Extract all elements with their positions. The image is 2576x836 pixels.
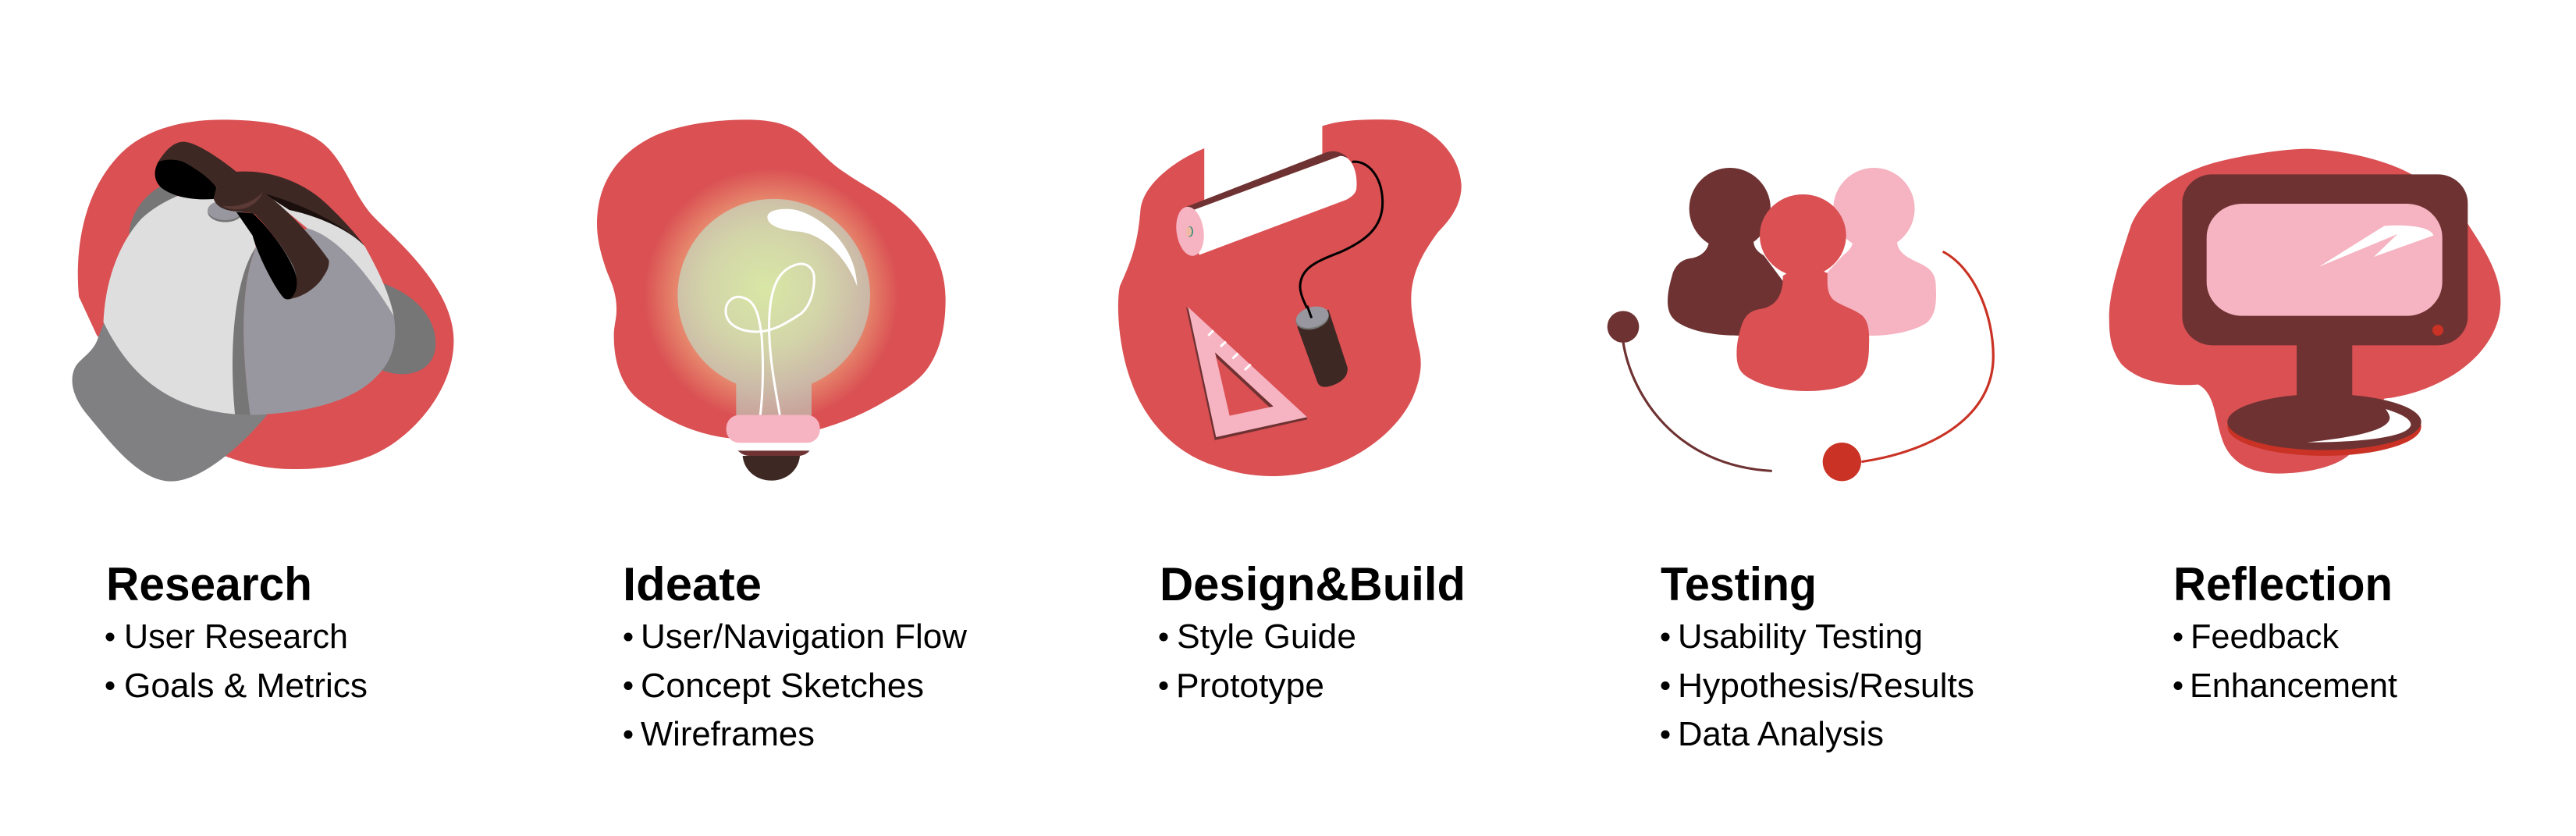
icon: ideate light bulb — [597, 119, 946, 481]
bow inner shadow — [261, 192, 364, 246]
roller wire handle — [1300, 162, 1383, 318]
hat button top — [208, 201, 243, 220]
set square shadow — [1186, 307, 1307, 440]
text block: Research — [106, 558, 368, 705]
icon: testing users and arcs — [1608, 168, 1993, 481]
hat dome grey panel — [243, 229, 395, 415]
text block: Testing — [1661, 558, 1974, 753]
wire tip — [1307, 306, 1312, 318]
hat dome light panel — [103, 196, 256, 414]
bulb base band — [735, 447, 811, 456]
heading: Design&Build — [1160, 558, 1466, 610]
heading: Reflection — [2173, 558, 2393, 610]
user dark — [1668, 168, 1785, 336]
list item: Prototype — [1176, 667, 1324, 705]
monitor screen — [2207, 204, 2443, 316]
set square hole — [1215, 353, 1274, 416]
heading: Testing — [1661, 558, 1817, 610]
user pink — [1821, 168, 1936, 336]
bulb collar — [727, 415, 820, 443]
list item: Enhancement — [2190, 667, 2397, 705]
red arc — [1861, 251, 1993, 462]
monitor stand base — [2227, 394, 2421, 450]
bulb highlight — [767, 209, 857, 286]
bulb filament — [726, 264, 814, 415]
text block: Design & Build — [1160, 558, 1466, 705]
set square ticks — [1208, 330, 1251, 370]
bulb glow — [644, 168, 899, 423]
text block: Reflection — [2173, 558, 2397, 705]
hat back flap left — [129, 186, 178, 234]
roller axle center — [1186, 227, 1192, 237]
list item: User/Navigation Flow — [641, 617, 967, 656]
power light — [2432, 325, 2443, 336]
bulb background blob — [597, 119, 946, 439]
roller sleeve — [1192, 156, 1357, 255]
base glare — [2307, 409, 2411, 443]
roller grip — [1297, 310, 1348, 387]
dark arc — [1623, 342, 1772, 471]
list item: Feedback — [2190, 617, 2340, 656]
list item: Hypothesis/Results — [1678, 667, 1974, 705]
monitor neck — [2297, 341, 2352, 400]
bow lower ribbon shadow — [236, 212, 297, 299]
monitor background blob — [2109, 149, 2500, 474]
list item: Usability Testing — [1678, 617, 1923, 656]
list item: User Research — [124, 617, 348, 656]
grip end shadow — [1293, 304, 1331, 333]
heading: Research — [106, 558, 312, 610]
list item: Goals & Metrics — [124, 667, 368, 705]
bow knot highlight — [222, 192, 263, 209]
grip end cap — [1294, 303, 1331, 331]
icon: research deerstalker hat — [73, 119, 453, 482]
list item: Style Guide — [1177, 617, 1356, 656]
hat seam — [233, 247, 256, 415]
roller white notch — [1204, 117, 1322, 201]
list item: Data Analysis — [1678, 715, 1884, 753]
dark node — [1608, 311, 1639, 343]
bulb white separator — [734, 443, 812, 450]
icon: design paint roller and set square — [1118, 117, 1462, 476]
roller axle — [1186, 226, 1193, 237]
hat button — [208, 201, 243, 222]
monitor frame — [2182, 174, 2468, 345]
screen glare — [2319, 226, 2433, 267]
list item: Concept Sketches — [641, 667, 924, 705]
bulb glass — [677, 199, 870, 418]
user red — [1736, 194, 1869, 391]
set square hole shadow — [1215, 353, 1274, 407]
list item: Wireframes — [641, 715, 815, 753]
heading: Ideate — [623, 558, 762, 610]
text block: Ideate — [623, 558, 967, 753]
hat back flap right — [382, 283, 435, 374]
monitor stand base shadow — [2227, 397, 2421, 456]
hat background blob — [78, 119, 453, 469]
hat brim — [73, 322, 267, 482]
bulb screw cap — [743, 456, 800, 481]
hat dome upper right light panel — [270, 197, 394, 316]
set square — [1188, 307, 1307, 437]
icon: reflection monitor — [2109, 149, 2500, 474]
roller end cap — [1173, 205, 1207, 258]
roller background blob — [1118, 119, 1462, 476]
red node — [1823, 443, 1861, 481]
bow loop underside — [155, 160, 216, 199]
bow upper loop and ribbons — [158, 142, 364, 299]
roller top edge — [1186, 151, 1348, 211]
